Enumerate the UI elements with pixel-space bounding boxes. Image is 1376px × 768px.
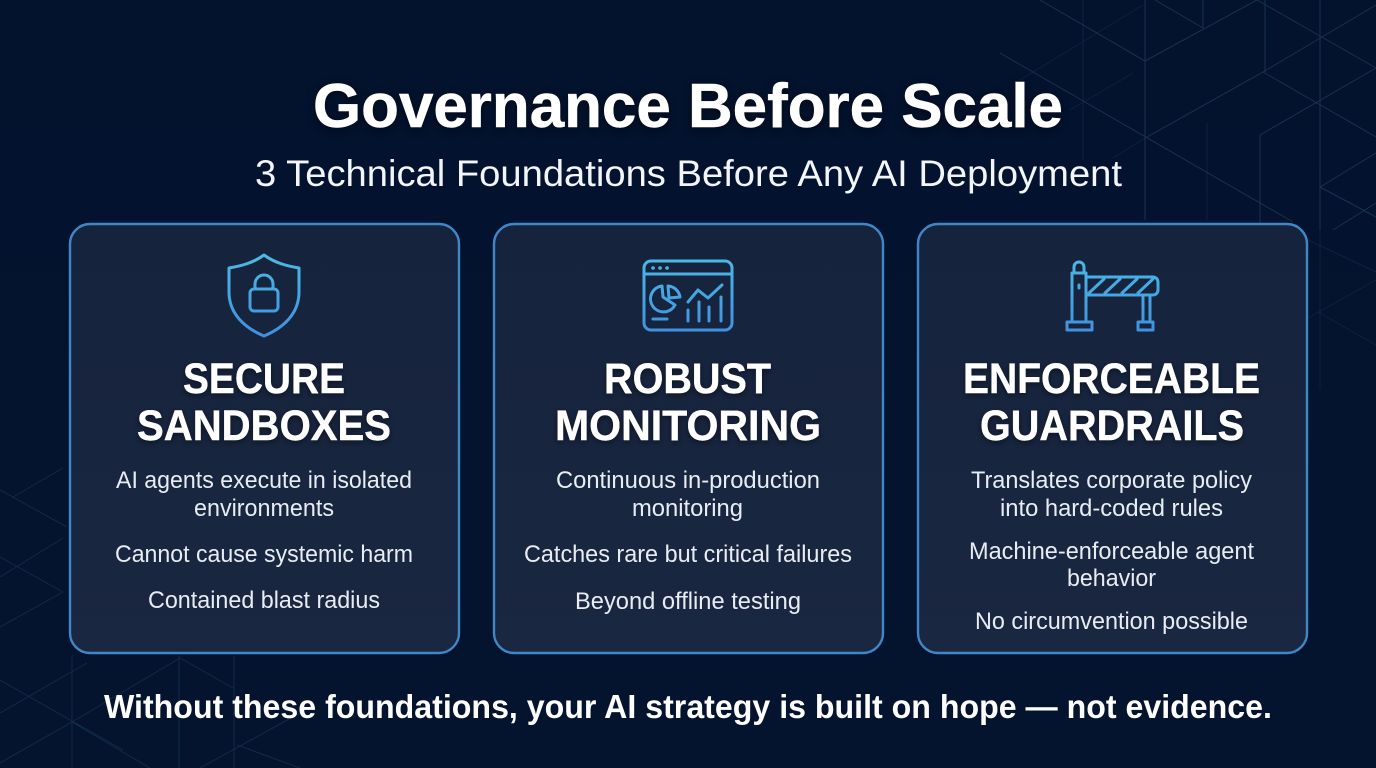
text block: guardrail points: Translates corporate policy [971,467,1252,494]
text block: sandbox points: environments [194,495,334,522]
heading: enforceable guardrails: ENFORCEABLE [963,355,1260,403]
title: Governance Before Scale [313,72,1063,141]
heading: robust monitoring: ROBUST [604,355,771,403]
subtitle: 3 Technical Foundations Before Any AI Deployment [255,153,1123,194]
panel: enforceable guardrails [918,224,1307,653]
text block: monitoring points: monitoring [632,495,743,522]
heading: secure sandboxes [137,355,391,450]
text block: monitoring points [524,467,852,615]
text block: sandbox points [115,467,413,614]
heading: robust monitoring: MONITORING [555,402,821,450]
text block: guardrail points: No circumvention possible [975,608,1248,635]
icon: dashboard window with charts [644,261,732,330]
heading: secure sandboxes: SANDBOXES [137,402,391,450]
text block: guardrail points: into hard-coded rules [1000,495,1223,522]
heading: enforceable guardrails [963,355,1260,450]
text block: guardrail points: Machine-enforceable agent [969,538,1254,565]
panel: secure sandboxes [70,224,459,653]
text block: sandbox points: Cannot cause systemic harm [115,541,413,568]
heading: enforceable guardrails: GUARDRAILS [980,402,1244,450]
icon: boom barrier [1067,262,1158,330]
text block: sandbox points: AI agents execute in isolated [116,467,412,494]
panel: robust monitoring [494,224,883,653]
text block: monitoring points: Catches rare but critical failures [524,541,852,568]
text block: guardrail points: behavior [1067,565,1156,592]
icon: shield with padlock [229,255,299,336]
heading: robust monitoring [555,355,821,450]
text block: monitoring points: Continuous in-production [556,467,820,494]
text block: sandbox points: Contained blast radius [148,587,380,614]
closing statement: Without these foundations, your AI strategy is built on hope — not evidence. [104,688,1272,725]
text block: guardrail points [969,467,1254,635]
heading: secure sandboxes: SECURE [183,355,345,403]
text block: monitoring points: Beyond offline testing [575,588,801,615]
